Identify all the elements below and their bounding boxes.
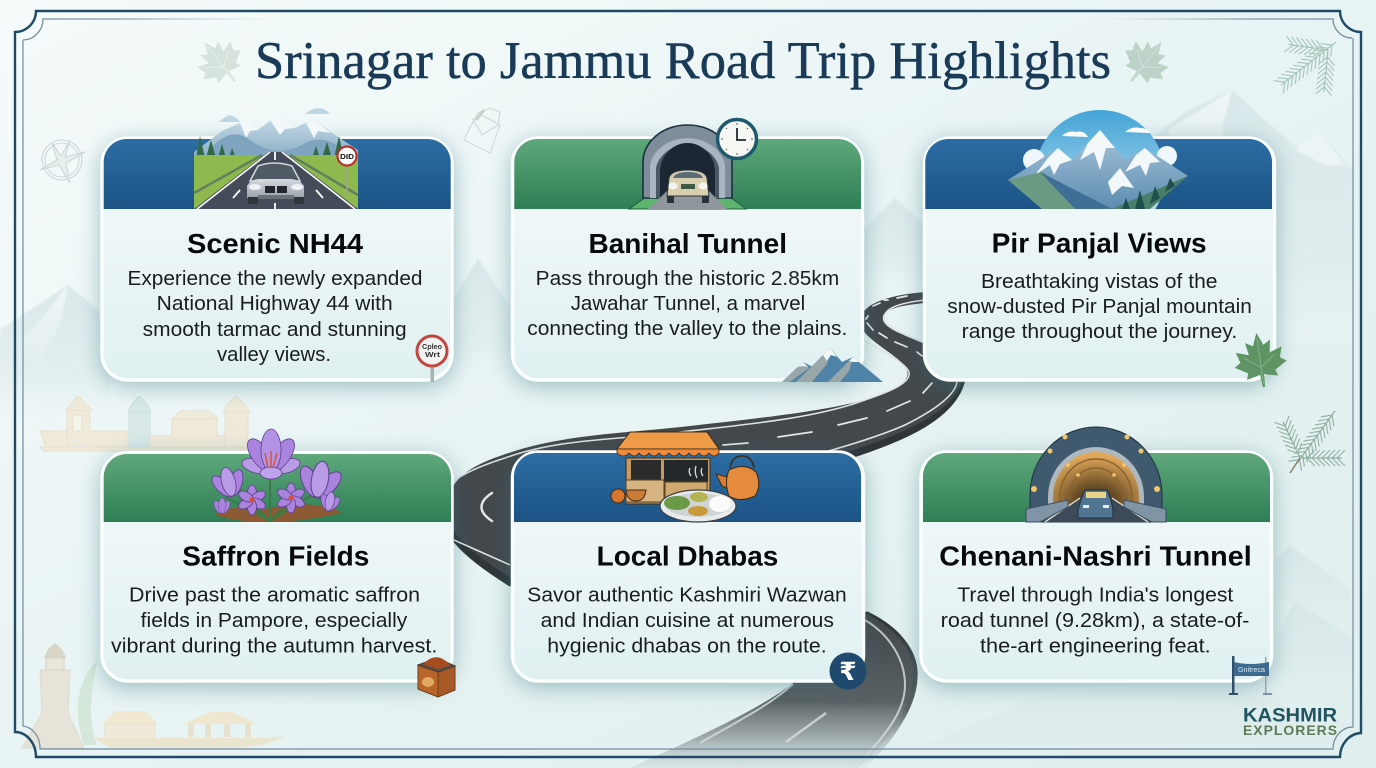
description: and Indian cuisine at numerous bbox=[541, 609, 834, 632]
road surface bbox=[445, 292, 962, 768]
description bbox=[941, 584, 1249, 658]
illustration: highway with car bbox=[194, 115, 358, 209]
lower left bloom bbox=[237, 485, 267, 515]
description: Breathtaking vistas of the bbox=[981, 270, 1218, 293]
bottom left watermark: minaret and shikara bbox=[22, 643, 286, 748]
description: fields in Pampore, especially bbox=[141, 609, 408, 632]
icon: title maple leaf left bbox=[186, 28, 254, 96]
logo: Kashmir Explorers: KASHMIR bbox=[1243, 704, 1337, 726]
logo: Kashmir Explorers: EXPLORERS bbox=[1243, 722, 1338, 738]
description: Jawahar Tunnel, a marvel bbox=[571, 292, 805, 315]
road centre dashes bbox=[482, 296, 932, 521]
icon: clock bbox=[718, 120, 756, 158]
description: Experience the newly expanded bbox=[128, 267, 422, 290]
icon: rupee badge bbox=[830, 652, 866, 690]
illustration: tunnel portal bbox=[629, 125, 746, 209]
description bbox=[111, 584, 437, 658]
road thickness bbox=[445, 373, 962, 768]
lower right bloom bbox=[276, 483, 306, 513]
description: National Highway 44 with bbox=[157, 292, 393, 315]
winding road bbox=[445, 292, 962, 768]
icon: destination signboard bbox=[1229, 656, 1272, 695]
left bloom bbox=[206, 463, 252, 504]
far left bloom bbox=[212, 498, 232, 515]
icon: small speed sign: Wrt bbox=[425, 352, 441, 359]
icon: pine sprig right bbox=[1283, 411, 1342, 473]
description: range throughout the journey. bbox=[962, 320, 1237, 343]
panel: Chenani-Nashri Tunnel bbox=[921, 427, 1272, 695]
heading: Banihal Tunnel bbox=[588, 228, 787, 259]
road edge lines bbox=[453, 300, 957, 565]
panel: Local Dhabas bbox=[512, 432, 866, 690]
description: snow-dusted Pir Panjal mountain bbox=[947, 295, 1252, 318]
icon: maple leaf bbox=[1230, 329, 1290, 391]
panel: Pir Panjal Views bbox=[924, 110, 1290, 391]
description: Travel through India's longest bbox=[957, 584, 1234, 607]
far right bloom bbox=[316, 490, 343, 515]
heading: Saffron Fields bbox=[182, 541, 369, 572]
illustration: dhaba stall and thali bbox=[611, 432, 719, 504]
icon: cloud bbox=[218, 108, 330, 122]
title: Srinagar to Jammu Road Trip Highlights bbox=[255, 32, 1111, 90]
description: hygienic dhabas on the route. bbox=[547, 635, 827, 658]
heading: Chenani-Nashri Tunnel bbox=[939, 541, 1252, 572]
logo: Kashmir Explorers bbox=[1243, 704, 1338, 738]
icon: kettle bbox=[716, 456, 759, 500]
description: Savor authentic Kashmiri Wazwan bbox=[527, 584, 847, 607]
panel: Banihal Tunnel bbox=[512, 120, 883, 382]
description: Pass through the historic 2.85km bbox=[536, 267, 839, 290]
car front bbox=[247, 163, 304, 204]
icon: road sign: DID bbox=[340, 152, 355, 161]
description: valley views. bbox=[217, 343, 331, 366]
description: vibrant during the autumn harvest. bbox=[111, 635, 437, 658]
description bbox=[527, 267, 847, 340]
icon: title maple leaf right bbox=[1112, 28, 1180, 96]
icon: saffron box bbox=[418, 657, 455, 697]
skyline watermark bbox=[40, 396, 250, 451]
illustration: mountain medallion bbox=[1008, 110, 1188, 209]
heading: Scenic NH44 bbox=[187, 228, 364, 259]
icon: small speed sign bbox=[417, 336, 447, 382]
description: connecting the valley to the plains. bbox=[527, 317, 847, 340]
icon: destination signboard: Gnitreca bbox=[1238, 667, 1265, 674]
large bloom bbox=[240, 429, 302, 479]
illustration: saffron crocus bbox=[206, 429, 348, 522]
icon: small mountains bbox=[782, 348, 883, 382]
heading: Local Dhabas bbox=[597, 541, 778, 572]
panel: Saffron Fields bbox=[102, 429, 455, 697]
heading: Pir Panjal Views bbox=[992, 228, 1207, 258]
description bbox=[128, 267, 422, 366]
icon: road sign bbox=[338, 146, 356, 195]
description bbox=[947, 270, 1252, 343]
icon: rupee badge: ₹ bbox=[839, 657, 857, 686]
icon: map and bag sketch bbox=[464, 108, 500, 153]
right bloom bbox=[291, 457, 348, 506]
icon: compass bbox=[40, 140, 85, 183]
icon: thali plate bbox=[660, 490, 736, 522]
description bbox=[527, 584, 847, 658]
description: Drive past the aromatic saffron bbox=[129, 584, 420, 607]
description: the-art engineering feat. bbox=[980, 635, 1211, 658]
panel: Scenic NH44 bbox=[102, 108, 452, 382]
icon: small speed sign: Cpleo bbox=[422, 344, 442, 351]
description: smooth tarmac and stunning bbox=[143, 318, 407, 341]
description: road tunnel (9.28km), a state-of- bbox=[941, 609, 1249, 632]
icon: pine sprig top right bbox=[1281, 42, 1336, 92]
illustration: lit tunnel bbox=[1026, 427, 1166, 522]
